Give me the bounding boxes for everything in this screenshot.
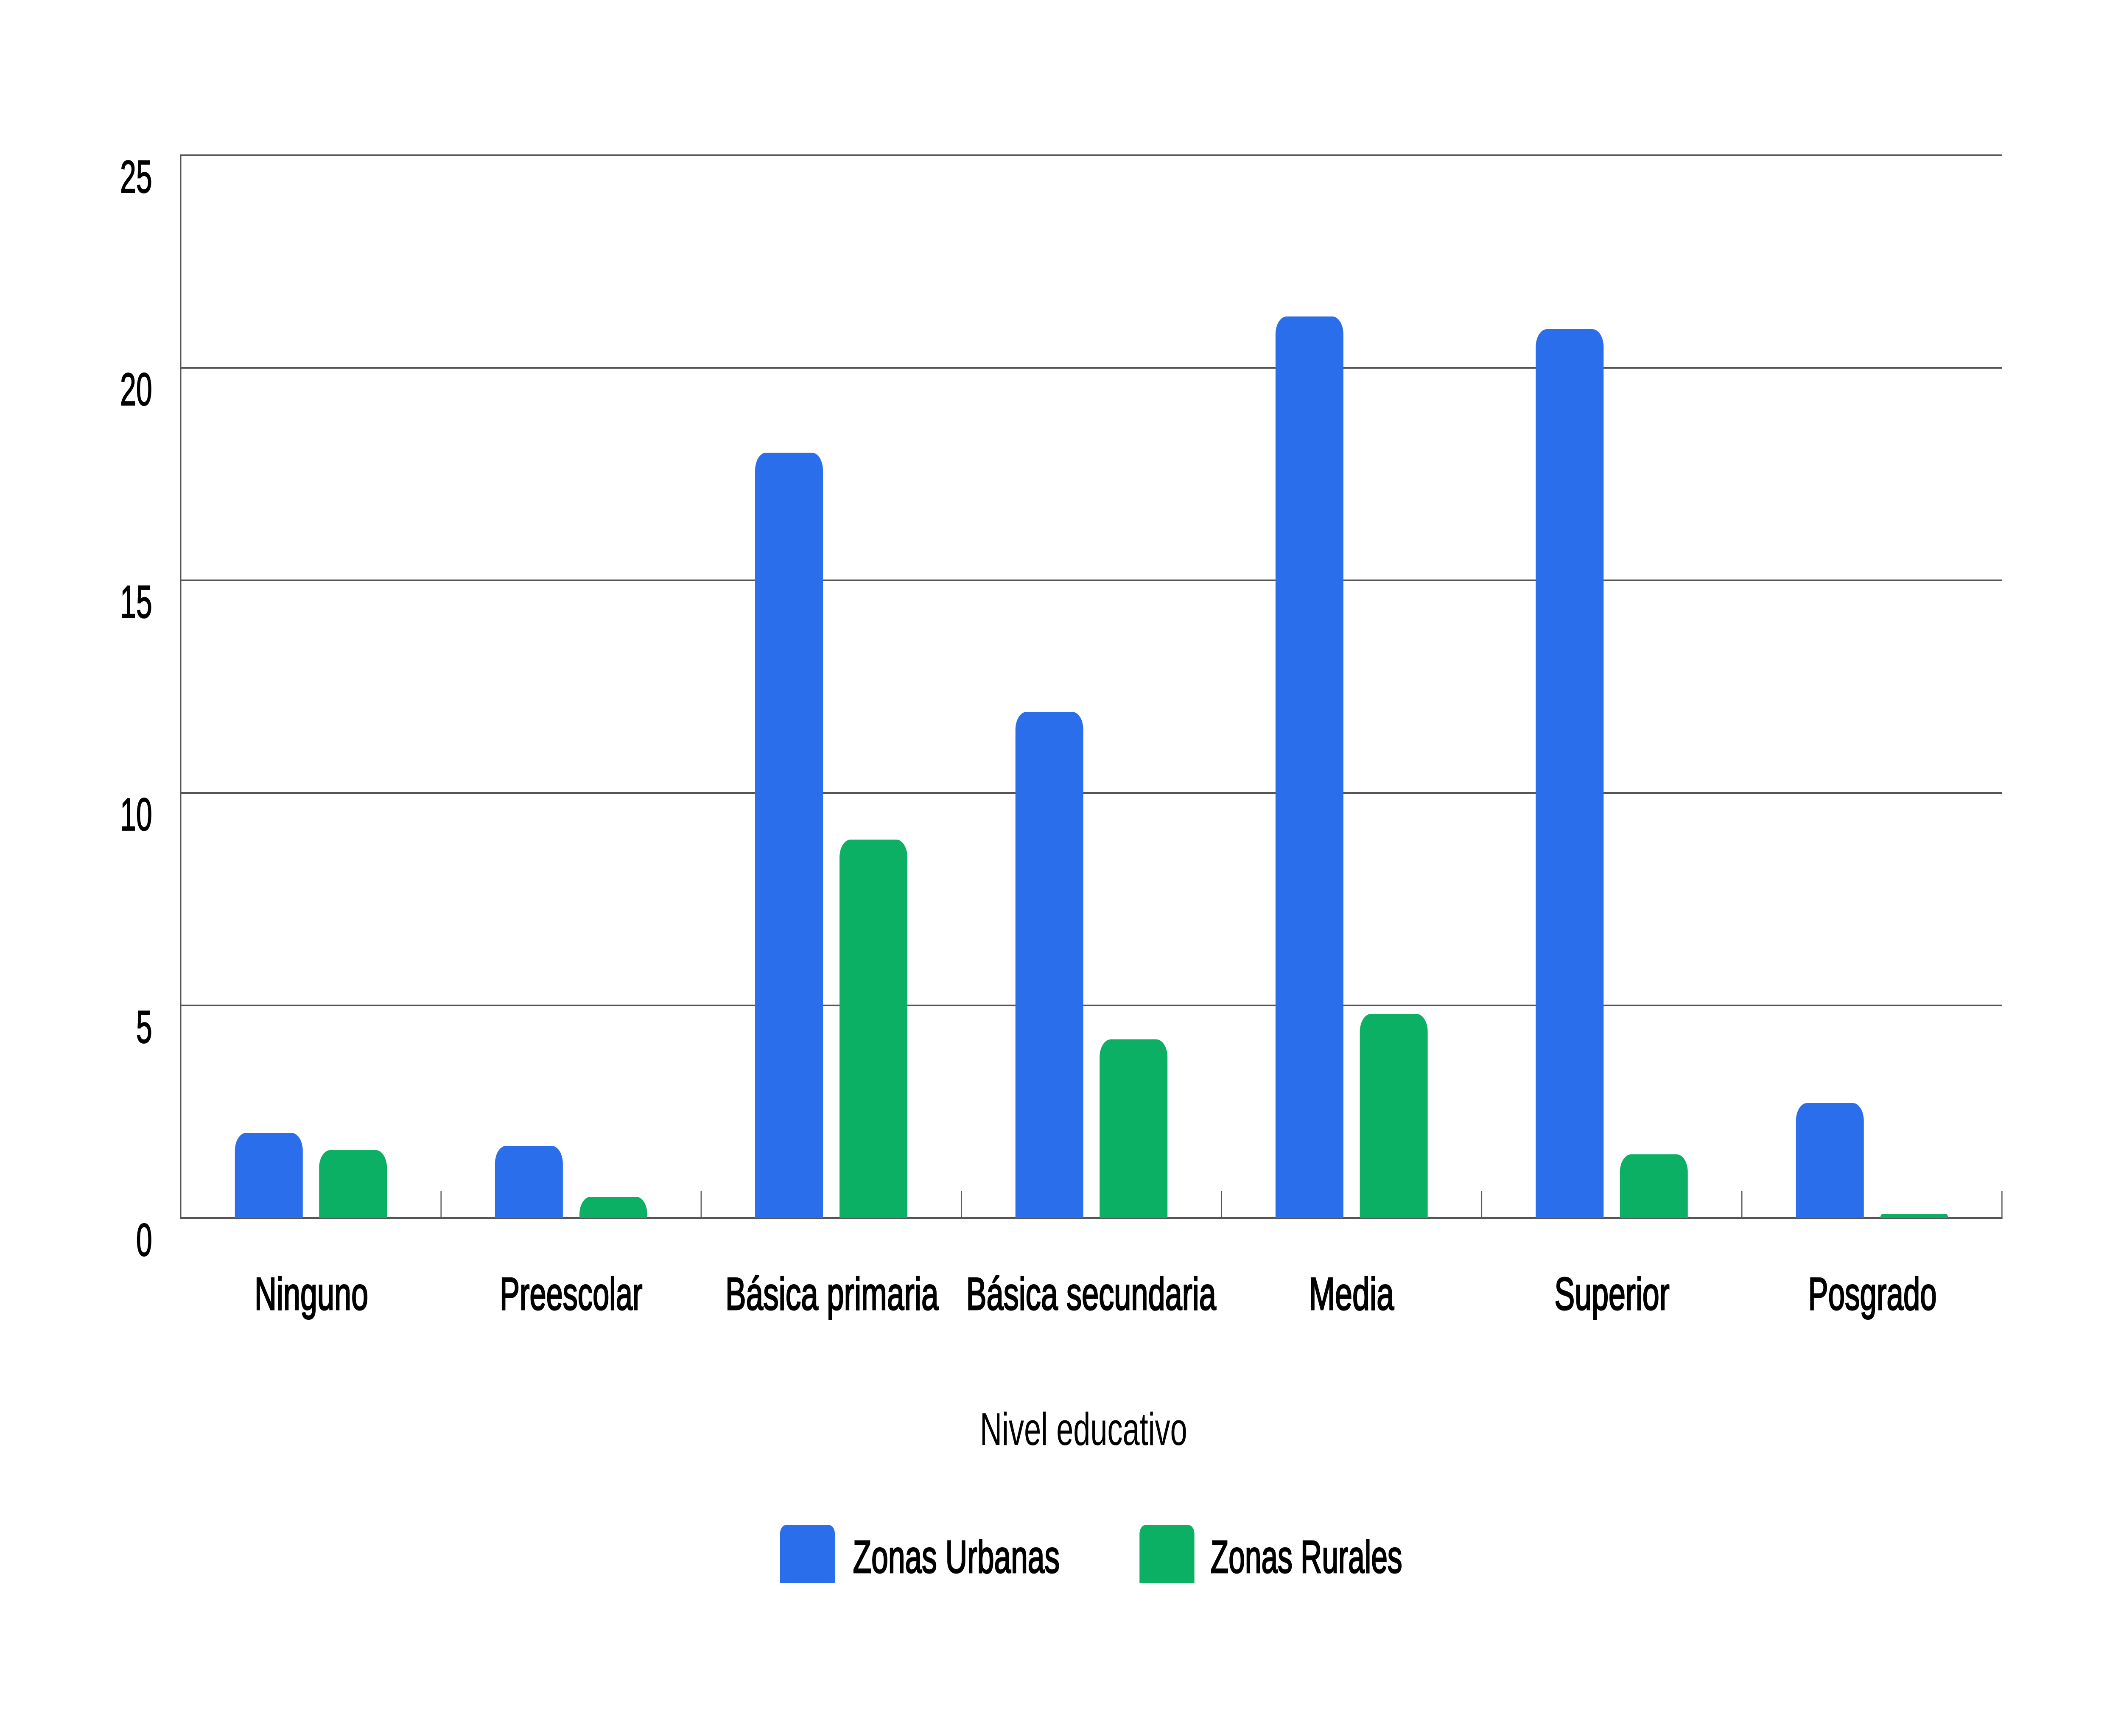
plot grid and axes (180, 154, 2003, 1219)
y-axis labels (120, 151, 152, 1266)
x-axis title: Nivel educativo (980, 1404, 1187, 1455)
x-axis category labels: Media (1309, 1268, 1394, 1320)
bars: Zonas Rurales (319, 840, 1948, 1218)
x-axis category labels: Posgrado (1808, 1268, 1937, 1320)
legend (780, 1525, 1402, 1583)
legend item: Zonas Urbanas: Zonas Urbanas (853, 1532, 1060, 1583)
y-axis labels: 5 (136, 1002, 152, 1053)
bars: Zonas Urbanas (235, 316, 1864, 1218)
legend item: Zonas Urbanas (780, 1525, 1060, 1583)
x-axis category labels (255, 1268, 1937, 1320)
legend item: Zonas Rurales (1139, 1525, 1402, 1583)
legend item: Zonas Rurales: Zonas Rurales (1211, 1532, 1402, 1583)
y-axis labels: 25 (120, 151, 152, 203)
y-axis labels: 0 (136, 1215, 152, 1266)
x-axis category labels: Ninguno (255, 1268, 368, 1320)
y-axis labels: 20 (120, 364, 152, 415)
y-axis labels: 15 (120, 577, 152, 628)
x-axis category labels: Básica primaria (725, 1268, 939, 1320)
y-axis labels: 10 (120, 789, 152, 840)
x-axis category labels: Superior (1554, 1268, 1670, 1320)
x-axis category labels: Preescolar (500, 1268, 642, 1320)
x-axis category labels: Básica secundaria (966, 1268, 1216, 1320)
